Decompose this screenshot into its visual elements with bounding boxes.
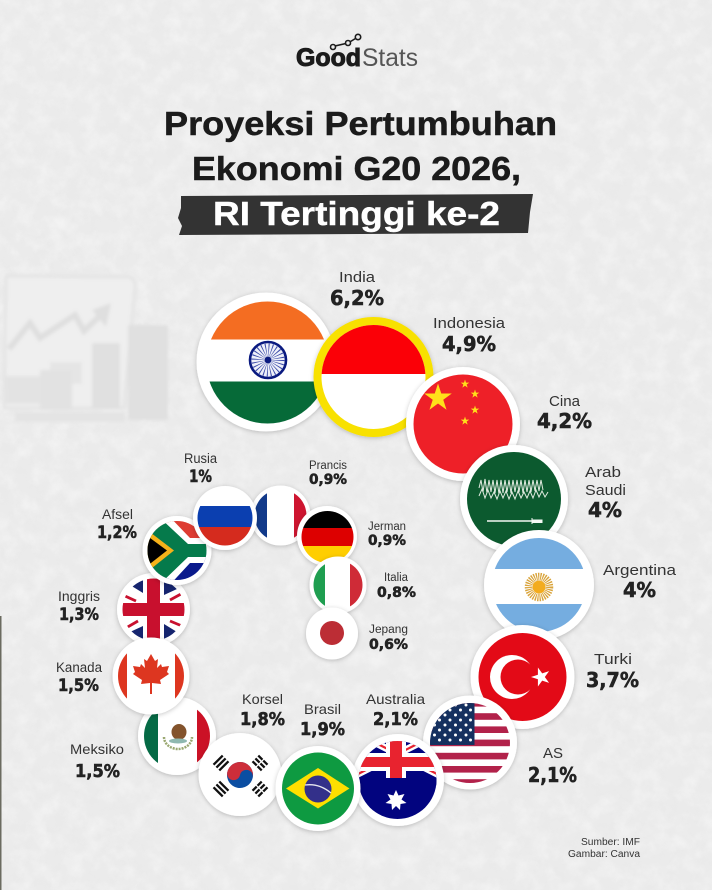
flag: Japan (306, 608, 358, 660)
flag: Germany (297, 506, 358, 566)
flag: Saudi Arabia (460, 445, 568, 553)
label: France: 0,9% (309, 472, 347, 488)
flag: Australia (350, 730, 445, 826)
label: Mexico: Meksiko (70, 741, 124, 757)
label: France (309, 460, 347, 488)
label: South Africa (97, 507, 137, 542)
label: Russia: 1% (189, 467, 212, 486)
label: Russia: Rusia (184, 451, 217, 466)
flag: China (406, 367, 520, 481)
flag: Turkey (470, 625, 574, 729)
label: Brazil: Brasil (304, 701, 341, 717)
flag: United States (423, 696, 517, 790)
label: Turkey: Turki (594, 651, 632, 668)
label: Germany: 0,9% (368, 533, 406, 549)
label: Russia (184, 451, 217, 486)
label: Japan (369, 624, 408, 653)
label: Brazil (300, 701, 345, 740)
label: Mexico (70, 741, 124, 782)
label: Saudi Arabia: 4% (588, 498, 622, 522)
logo: GoodStats (296, 34, 418, 72)
label: United Kingdom: 1,3% (59, 605, 99, 624)
source note (568, 837, 640, 860)
flag: Russia (193, 486, 257, 550)
label: Turkey (586, 651, 639, 692)
flag: South Africa (142, 512, 212, 590)
flag: Indonesia (314, 317, 434, 437)
label: Indonesia (433, 315, 506, 356)
background illustration: chart and coins (4, 276, 168, 422)
label: United Kingdom: Inggris (58, 589, 100, 604)
label: Italy: Italia (384, 572, 409, 584)
label: Japan: 0,6% (369, 637, 408, 653)
label: China (537, 393, 592, 433)
label: Argentina: 4% (623, 578, 656, 602)
label: Mexico: 1,5% (75, 761, 120, 782)
flag: Argentina (484, 530, 594, 640)
label: China: 4,2% (537, 409, 592, 433)
label: Canada: 1,5% (58, 676, 99, 695)
label: United States (528, 745, 577, 787)
label: India: 6,2% (330, 286, 384, 310)
label: South Korea: Korsel (242, 691, 283, 707)
label: United States: AS (543, 745, 563, 762)
label: China: Cina (549, 393, 581, 410)
subtitle banner: RI Tertinggi ke-2 (213, 195, 500, 232)
title: Proyeksi Pertumbuhan (164, 105, 557, 142)
flag: Italy (310, 556, 366, 614)
label: Germany (368, 521, 406, 549)
source note: Gambar: Canva (568, 849, 640, 860)
label: Indonesia: Indonesia (433, 315, 506, 332)
label: Canada: Kanada (56, 660, 102, 675)
label: India (330, 269, 384, 310)
label: Japan: Jepang (369, 624, 408, 636)
label: Saudi Arabia: Arab (585, 464, 621, 481)
label: United States: 2,1% (528, 763, 577, 787)
label: United Kingdom (58, 589, 100, 624)
label: South Korea (240, 691, 285, 730)
label: Indonesia: 4,9% (442, 332, 496, 356)
label: Brazil: 1,9% (300, 719, 345, 740)
flag: Brazil (276, 746, 360, 831)
label: Germany: Jerman (368, 521, 406, 533)
title (164, 105, 557, 187)
label: South Africa: 1,2% (97, 523, 137, 542)
label: Canada (56, 660, 102, 695)
label: India: India (339, 269, 376, 286)
source note: Sumber: IMF (581, 837, 640, 848)
label: Australia: 2,1% (373, 709, 418, 730)
label: South Africa: Afsel (102, 507, 133, 522)
label: Saudi Arabia: Saudi (585, 482, 626, 499)
label: Argentina: Argentina (603, 562, 677, 579)
logo: GoodStats: Good (296, 44, 361, 72)
label: Australia: Australia (366, 691, 425, 707)
label: France: Prancis (309, 460, 347, 472)
label: South Korea: 1,8% (240, 709, 285, 730)
flag: United Kingdom (117, 573, 190, 646)
label: Turkey: 3,7% (586, 668, 639, 692)
logo: GoodStats: Stats (362, 44, 418, 72)
label: Saudi Arabia (585, 464, 626, 522)
title: Ekonomi G20 2026, (192, 150, 521, 187)
label: Australia (366, 691, 425, 730)
label: Italy: 0,8% (377, 585, 416, 601)
subtitle banner (178, 194, 533, 235)
flag: South Korea (198, 733, 282, 816)
flag: India (196, 292, 336, 432)
flag: Canada (112, 638, 190, 714)
flag: France (250, 485, 311, 547)
label: Italy (377, 572, 416, 601)
flag: Mexico (138, 697, 216, 775)
label: Argentina (603, 562, 677, 602)
